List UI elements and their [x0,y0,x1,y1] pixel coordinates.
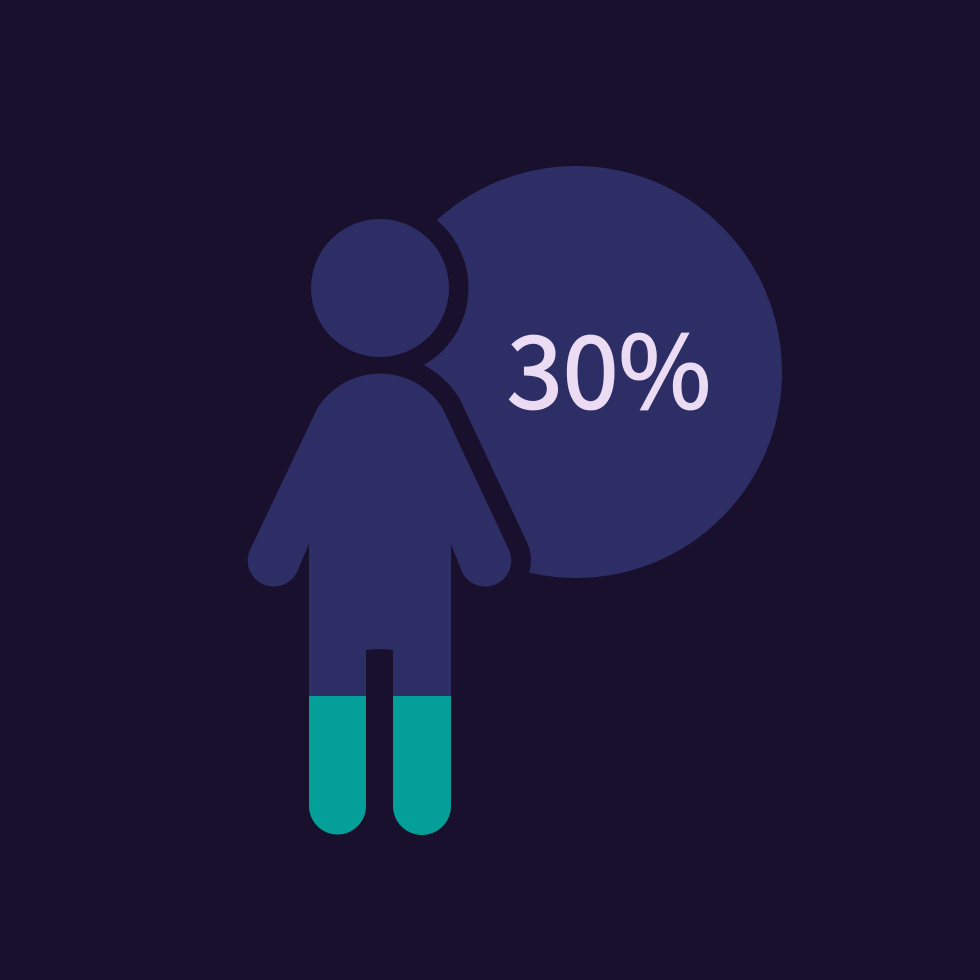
cut-out halo around the figure [248,219,511,696]
callout bubble with percentage [248,166,782,696]
highlighted lower leg: right [393,696,451,835]
percentage label: 30% [507,292,711,437]
highlighted lower leg: left [309,696,366,834]
person figure [248,219,511,835]
body and upper legs [248,374,511,696]
head [311,219,449,357]
